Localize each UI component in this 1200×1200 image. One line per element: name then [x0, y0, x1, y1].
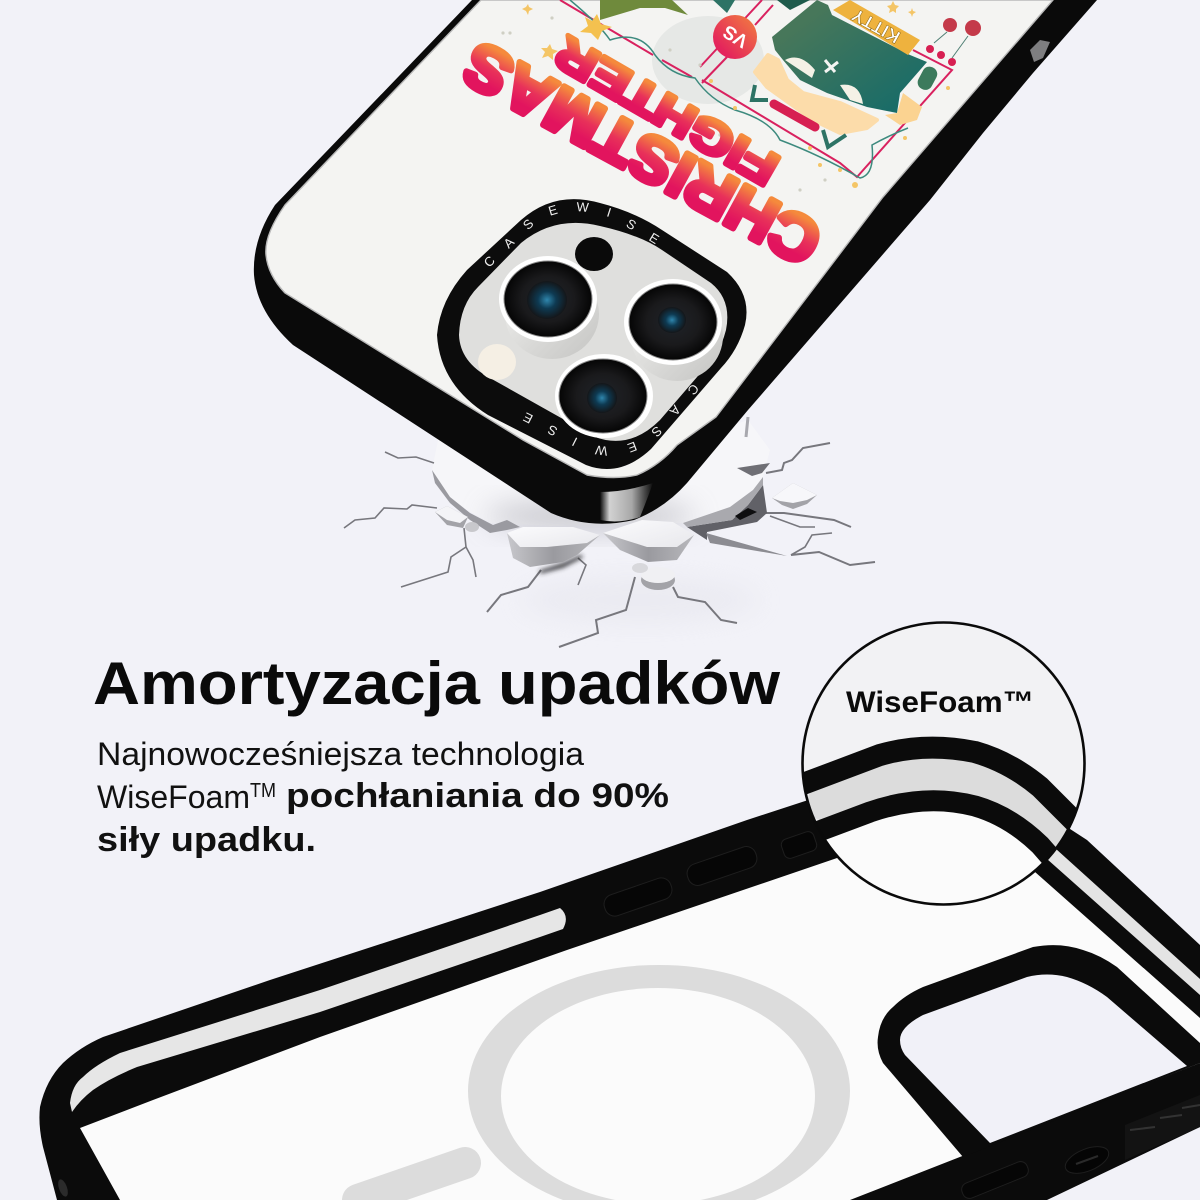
magnifier: label: WiseFoam™ [846, 686, 1034, 719]
case: side button notch [1030, 40, 1050, 62]
MagSafe alignment pill [358, 1163, 465, 1200]
crack: left slab edge [432, 470, 520, 533]
print: kitty label: KITTY [848, 5, 904, 47]
print: tree branch [600, 0, 688, 20]
body text: WiseFoam [97, 779, 250, 815]
clear back panel [80, 831, 1200, 1200]
print: VS badge: VS [719, 20, 752, 51]
crack: dark gap right [687, 485, 767, 540]
print: green character [772, 0, 927, 113]
flash [478, 344, 516, 380]
magnifier: clear panel [826, 812, 1042, 903]
case: outer black frame [254, 0, 1097, 524]
shard: centre right [603, 520, 694, 562]
frame: foam channel left [70, 908, 566, 1112]
print: snow [755, 55, 877, 133]
lens 3 [555, 354, 653, 438]
shard: centre left [507, 527, 600, 572]
microphone hole [575, 237, 613, 271]
camera island [437, 199, 747, 469]
island lettering: top: CASEWISE [484, 202, 660, 266]
small rocks [435, 483, 817, 590]
frame: outer black silhouette [39, 766, 1200, 1200]
body text: Najnowocześniejsza technologia [97, 736, 584, 772]
illustration: cracked ground [344, 417, 875, 647]
lens 2 [624, 279, 723, 381]
print: balloons [926, 18, 981, 66]
print: lettering CHRISTMAS: CHRISTMAS [451, 28, 833, 280]
phone: case with Christmas Fighter print [254, 0, 1097, 524]
magnifier: WiseFoam detail [801, 621, 1086, 906]
print: lettering FIGHTER: FIGHTER [546, 26, 787, 196]
camera opening [459, 223, 727, 441]
island lettering: bottom: CASEWISE [522, 385, 698, 456]
heading: Amortyzacja upadków [93, 650, 780, 717]
magnifier: outer frame [795, 748, 1090, 837]
MagSafe ring [468, 965, 850, 1200]
case: back surface [266, 0, 1053, 478]
print: illustration [501, 0, 981, 192]
bottom ports [56, 1095, 1200, 1200]
phone: clear case interior [39, 766, 1200, 1200]
crack: raised slabs [432, 420, 770, 526]
body text [97, 736, 669, 859]
frame: foam channel right [1020, 830, 1200, 995]
body text: TM [250, 780, 276, 802]
body text: pochłaniania do 90% [286, 777, 669, 815]
case: corner highlight [600, 483, 653, 521]
magnifier: inner frame [816, 790, 1056, 863]
print: grey moon [652, 16, 764, 104]
lens 1 [499, 256, 599, 359]
side buttons [601, 830, 818, 919]
print: kitty label [833, 0, 920, 55]
magnifier: foam band [808, 758, 1066, 846]
body text: siły upadku. [97, 821, 316, 859]
print: VS badge [713, 15, 757, 59]
camera cutout [878, 945, 1200, 1157]
